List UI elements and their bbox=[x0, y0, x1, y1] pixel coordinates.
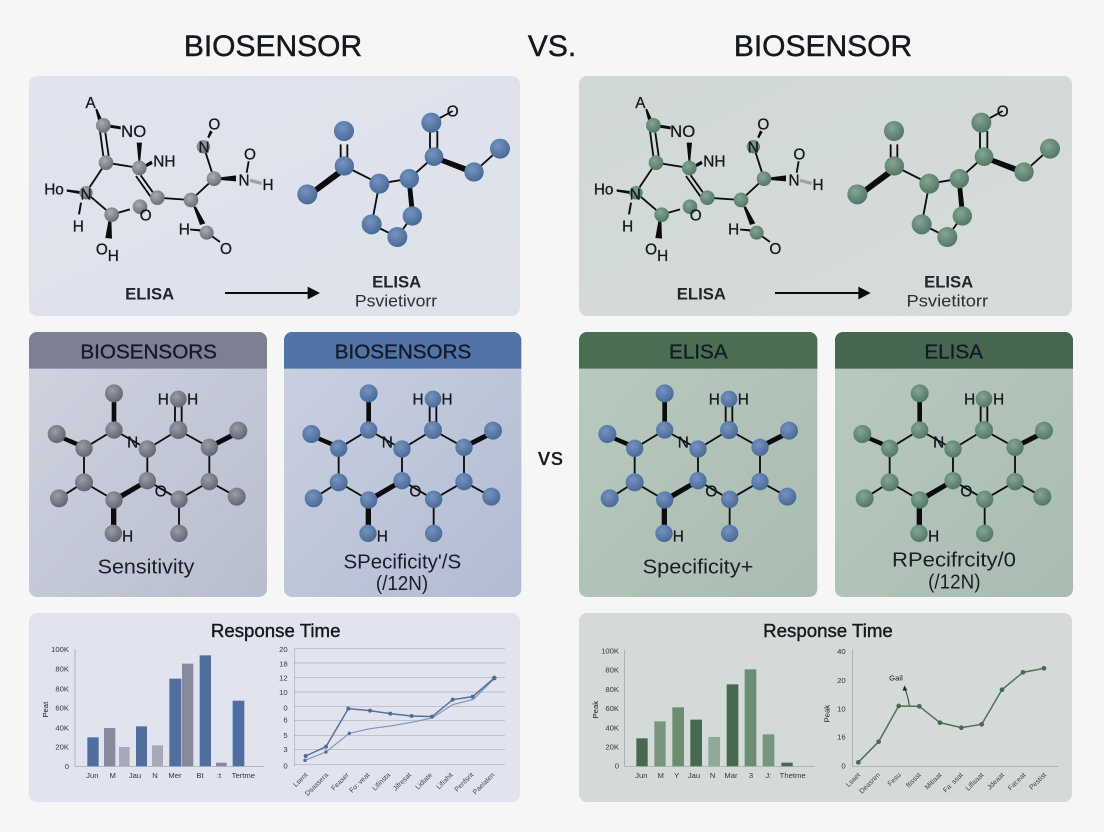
molecule: green hexagons: H bbox=[964, 392, 975, 409]
y axis labels: 40K bbox=[55, 723, 70, 732]
bar chart bbox=[591, 647, 814, 780]
y axis labels: 80K bbox=[55, 664, 70, 673]
header text: BIOSENSORS bbox=[80, 341, 217, 364]
molecule: green structure with atom labels: H bbox=[728, 222, 739, 239]
molecule: blue hexagons: H bbox=[412, 392, 424, 409]
x axis labels bbox=[845, 772, 1048, 795]
caption: Sensitivity bbox=[98, 555, 195, 578]
molecule: gray hexagons: H bbox=[158, 392, 169, 409]
x axis labels: Jdeaat bbox=[986, 772, 1006, 792]
molecule: gray structure with atom labels: NO bbox=[121, 122, 146, 141]
y axis labels: 10 bbox=[837, 704, 846, 713]
molecule: gray structure with atom labels: O bbox=[244, 146, 256, 163]
y axis labels: 0 bbox=[283, 761, 288, 770]
y axis labels: 80K bbox=[605, 685, 620, 694]
header text: ELISA bbox=[669, 341, 728, 364]
chart title: Response Time bbox=[211, 620, 340, 641]
molecule: gray structure with atom labels: O bbox=[208, 116, 220, 133]
y axis labels: 3 bbox=[283, 745, 288, 754]
y axis labels: Peak bbox=[591, 701, 600, 718]
y axis labels: 0 bbox=[841, 762, 846, 771]
molecule: gray hexagons bbox=[48, 384, 247, 545]
y axis labels bbox=[279, 645, 288, 770]
x axis labels: Deasren bbox=[858, 772, 882, 795]
molecule: green structure with atom labels: N bbox=[630, 186, 641, 203]
molecule: blue hexagons: H bbox=[441, 392, 453, 409]
label: ELISA product: Psvietivorr bbox=[355, 292, 438, 311]
chart title: Response Time bbox=[763, 620, 893, 641]
molecule: gray structure with atom labels: N bbox=[80, 186, 92, 203]
x axis labels: M bbox=[109, 771, 116, 780]
caption bbox=[892, 549, 1016, 594]
x axis labels: Mar bbox=[724, 771, 738, 780]
y axis labels: Peak bbox=[822, 705, 831, 722]
molecule: blue hexagons: O bbox=[409, 483, 421, 500]
y axis labels: 0 bbox=[615, 762, 619, 771]
x axis labels: Paeiaten bbox=[472, 772, 496, 796]
y axis labels: 16 bbox=[837, 733, 846, 742]
molecule: gray structure with atom labels: NH bbox=[153, 154, 175, 171]
molecule: green structure with atom labels: A bbox=[635, 95, 646, 112]
y axis labels: Peat bbox=[41, 701, 50, 718]
molecule: gray structure with atom labels: H bbox=[108, 248, 119, 265]
molecule: blue hexagons: O bbox=[705, 483, 717, 500]
molecule: green structure with atom labels: H bbox=[622, 219, 633, 236]
y axis labels: 60K bbox=[605, 704, 620, 713]
label: ELISA product bbox=[906, 272, 989, 311]
y axis labels: 100K bbox=[601, 647, 620, 656]
x axis labels: Dsassera bbox=[304, 772, 330, 798]
molecule: gray structure with atom labels: H bbox=[262, 177, 274, 194]
x axis labels bbox=[635, 771, 806, 780]
arrow bbox=[225, 287, 320, 299]
molecule: green structure with atom labels: H bbox=[812, 177, 824, 194]
caption: RPecifrcity/0 bbox=[892, 549, 1016, 572]
molecule: green structure with atom labels: O bbox=[757, 116, 769, 133]
card header bbox=[29, 332, 267, 369]
molecule: green hexagons bbox=[853, 384, 1053, 545]
x axis labels: Fat:eat bbox=[1007, 772, 1027, 792]
label: ELISA product: ELISA bbox=[924, 272, 973, 291]
x axis labels: Liflsaat bbox=[965, 772, 985, 792]
label: ELISA: ELISA bbox=[677, 284, 726, 303]
y axis labels: 60K bbox=[55, 704, 70, 713]
molecule: gray structure with atom labels: O bbox=[140, 207, 152, 224]
x axis labels: Mer bbox=[168, 771, 182, 780]
bars bbox=[87, 655, 244, 766]
x axis labels: N bbox=[152, 771, 158, 780]
y axis labels: 20K bbox=[55, 743, 70, 752]
molecule: gray structure with atom labels: A bbox=[86, 95, 97, 112]
bar chart bbox=[41, 645, 264, 780]
molecule: blue structure: O bbox=[447, 104, 459, 121]
bars bbox=[636, 669, 793, 766]
series line bbox=[858, 668, 1044, 762]
x axis labels: Fesu bbox=[887, 772, 903, 788]
card header bbox=[835, 332, 1073, 369]
x axis labels: 3 bbox=[749, 771, 753, 780]
y axis labels: 40K bbox=[605, 723, 620, 732]
molecule: green structure with atom labels: O bbox=[645, 241, 657, 258]
x axis labels: Tertme bbox=[232, 771, 255, 780]
molecule: green structure with atom labels bbox=[594, 95, 824, 265]
annotation: Gail with arrow: Gail bbox=[889, 673, 903, 682]
molecule: green structure with atom labels: H bbox=[657, 248, 668, 265]
y axis labels: 6 bbox=[283, 715, 288, 724]
y axis labels: 5 bbox=[283, 731, 288, 740]
molecule: blue hexagons: H bbox=[673, 528, 684, 545]
x axis labels: Thetme bbox=[780, 771, 806, 780]
title: left biosensor: BIOSENSOR bbox=[184, 30, 362, 63]
x axis labels: Jau bbox=[688, 771, 700, 780]
x axis labels: Fo: veat bbox=[349, 772, 371, 795]
molecule: green structure: O bbox=[997, 104, 1009, 121]
title: right biosensor: BIOSENSOR bbox=[734, 30, 912, 63]
panel: top right molecules bbox=[579, 76, 1072, 316]
y axis labels bbox=[822, 647, 846, 771]
y axis labels: 80K bbox=[605, 666, 620, 675]
card header bbox=[579, 332, 817, 369]
series markers bbox=[303, 676, 497, 762]
title: VS.: VS. bbox=[528, 30, 576, 63]
header text: BIOSENSORS bbox=[335, 341, 471, 364]
x axis labels: Bt bbox=[196, 771, 204, 780]
x axis labels: Jau bbox=[129, 771, 141, 780]
molecule: gray structure with atom labels: O bbox=[220, 241, 232, 258]
x axis labels: M bbox=[657, 771, 664, 780]
y axis labels: 40 bbox=[837, 647, 846, 656]
molecule: green structure with atom labels: O bbox=[793, 146, 805, 163]
panel: ELISA green molecule card bbox=[835, 332, 1073, 597]
x axis labels: Jun bbox=[635, 771, 648, 780]
x axis labels: Jifresat bbox=[392, 772, 413, 793]
x axis labels: Lsent bbox=[292, 772, 309, 789]
y axis labels: 100K bbox=[51, 645, 70, 654]
molecule: blue hexagons: N bbox=[678, 434, 689, 451]
molecule: blue hexagons bbox=[302, 384, 502, 545]
molecule: gray structure with atom labels bbox=[44, 95, 274, 265]
y axis labels: 20 bbox=[279, 645, 288, 654]
x axis labels: Mitiaat bbox=[924, 772, 943, 791]
line chart bbox=[822, 647, 1058, 795]
x axis labels: :t bbox=[217, 771, 222, 780]
y axis labels: 0 bbox=[283, 703, 288, 712]
molecule: gray structure with atom labels: N bbox=[238, 172, 250, 189]
label: ELISA: ELISA bbox=[125, 284, 174, 303]
molecule: gray structure with atom labels: Ho bbox=[44, 181, 64, 198]
panel: biosensors blue card bbox=[284, 332, 521, 597]
card header bbox=[284, 332, 521, 369]
x axis labels: Pestist bbox=[1028, 772, 1048, 792]
label: ELISA product bbox=[355, 272, 438, 311]
panel: biosensors gray card bbox=[29, 332, 267, 597]
line chart bbox=[279, 645, 505, 798]
molecule: green structure with atom labels: NO bbox=[670, 122, 695, 141]
x axis labels: Feaser bbox=[330, 771, 351, 792]
caption: SPecificity'/S bbox=[343, 551, 461, 574]
molecule: gray structure with atom labels: O bbox=[96, 241, 108, 258]
molecule: blue hexagons: N bbox=[382, 434, 393, 451]
x axis labels: Lidiate bbox=[415, 772, 434, 791]
x axis labels: Y bbox=[674, 771, 679, 780]
x axis labels: ftissst bbox=[905, 772, 923, 789]
x axis labels bbox=[292, 771, 496, 798]
molecule: blue hexagons: H bbox=[377, 528, 388, 545]
molecule: green structure with atom labels: NH bbox=[703, 154, 725, 171]
x axis labels: Lsaet bbox=[845, 772, 862, 789]
molecule: green structure with atom labels: O bbox=[690, 207, 702, 224]
caption: (/12N) bbox=[928, 571, 980, 594]
y axis labels bbox=[41, 645, 70, 771]
caption: Specificity+ bbox=[643, 555, 753, 578]
x axis labels: J: bbox=[765, 771, 771, 780]
molecule: green hexagons: H bbox=[993, 392, 1004, 409]
molecule: green structure with atom labels: N bbox=[788, 172, 800, 189]
x axis labels: Lifinsta bbox=[371, 772, 392, 792]
molecule: gray hexagons: N bbox=[127, 434, 138, 451]
molecule: green structure bbox=[847, 104, 1060, 247]
series markers bbox=[856, 666, 1046, 765]
y axis labels: 20K bbox=[605, 742, 620, 751]
y axis labels: 20 bbox=[837, 676, 846, 685]
x axis labels: Penfsrit bbox=[454, 772, 475, 793]
molecule: blue hexagons: H bbox=[738, 392, 749, 409]
y axis labels: 12 bbox=[279, 674, 288, 683]
molecule: blue structure bbox=[297, 104, 510, 247]
molecule: green hexagons: N bbox=[933, 434, 944, 451]
annotation: Gail with arrow bbox=[889, 673, 909, 705]
molecule: gray hexagons: H bbox=[187, 392, 198, 409]
header text: ELISA bbox=[924, 341, 983, 364]
molecule: green structure with atom labels: Ho bbox=[594, 181, 613, 198]
y axis labels bbox=[591, 647, 620, 771]
y axis labels: 80K bbox=[55, 684, 70, 693]
molecule: gray structure with atom labels: H bbox=[179, 222, 190, 239]
series lines bbox=[305, 678, 494, 760]
panel: response time left bbox=[29, 613, 520, 802]
molecule: gray structure with atom labels: H bbox=[73, 219, 84, 236]
molecule: green structure with atom labels: O bbox=[769, 241, 781, 258]
x axis labels: N bbox=[710, 771, 715, 780]
x axis labels: Fa: ssat bbox=[942, 772, 965, 794]
molecule: green hexagons: O bbox=[960, 483, 972, 500]
arrow bbox=[775, 287, 871, 299]
y axis labels: 18 bbox=[279, 659, 288, 668]
caption: (/12N) bbox=[376, 572, 428, 595]
x axis labels: Lifiahit bbox=[436, 772, 455, 791]
molecule: gray hexagons: H bbox=[122, 528, 133, 545]
label: ELISA product: ELISA bbox=[372, 272, 421, 291]
molecule: green structure with atom labels: N bbox=[748, 140, 759, 157]
molecule: blue hexagons bbox=[598, 384, 798, 545]
y axis labels: 0 bbox=[65, 762, 69, 771]
versus label: vs bbox=[538, 444, 564, 471]
molecule: gray hexagons: O bbox=[155, 483, 167, 500]
caption bbox=[343, 551, 461, 595]
panel: response time right bbox=[579, 613, 1072, 802]
panel: ELISA blue molecule card bbox=[579, 332, 817, 597]
molecule: gray structure with atom labels: N bbox=[198, 140, 210, 157]
y axis labels: 10 bbox=[279, 688, 288, 697]
x axis labels bbox=[86, 771, 255, 780]
label: ELISA product: Psvietitorr bbox=[906, 292, 989, 311]
molecule: blue hexagons: H bbox=[709, 392, 720, 409]
panel: top left molecules bbox=[29, 76, 520, 316]
x axis labels: Jun bbox=[86, 771, 99, 780]
molecule: green hexagons: H bbox=[928, 528, 939, 545]
